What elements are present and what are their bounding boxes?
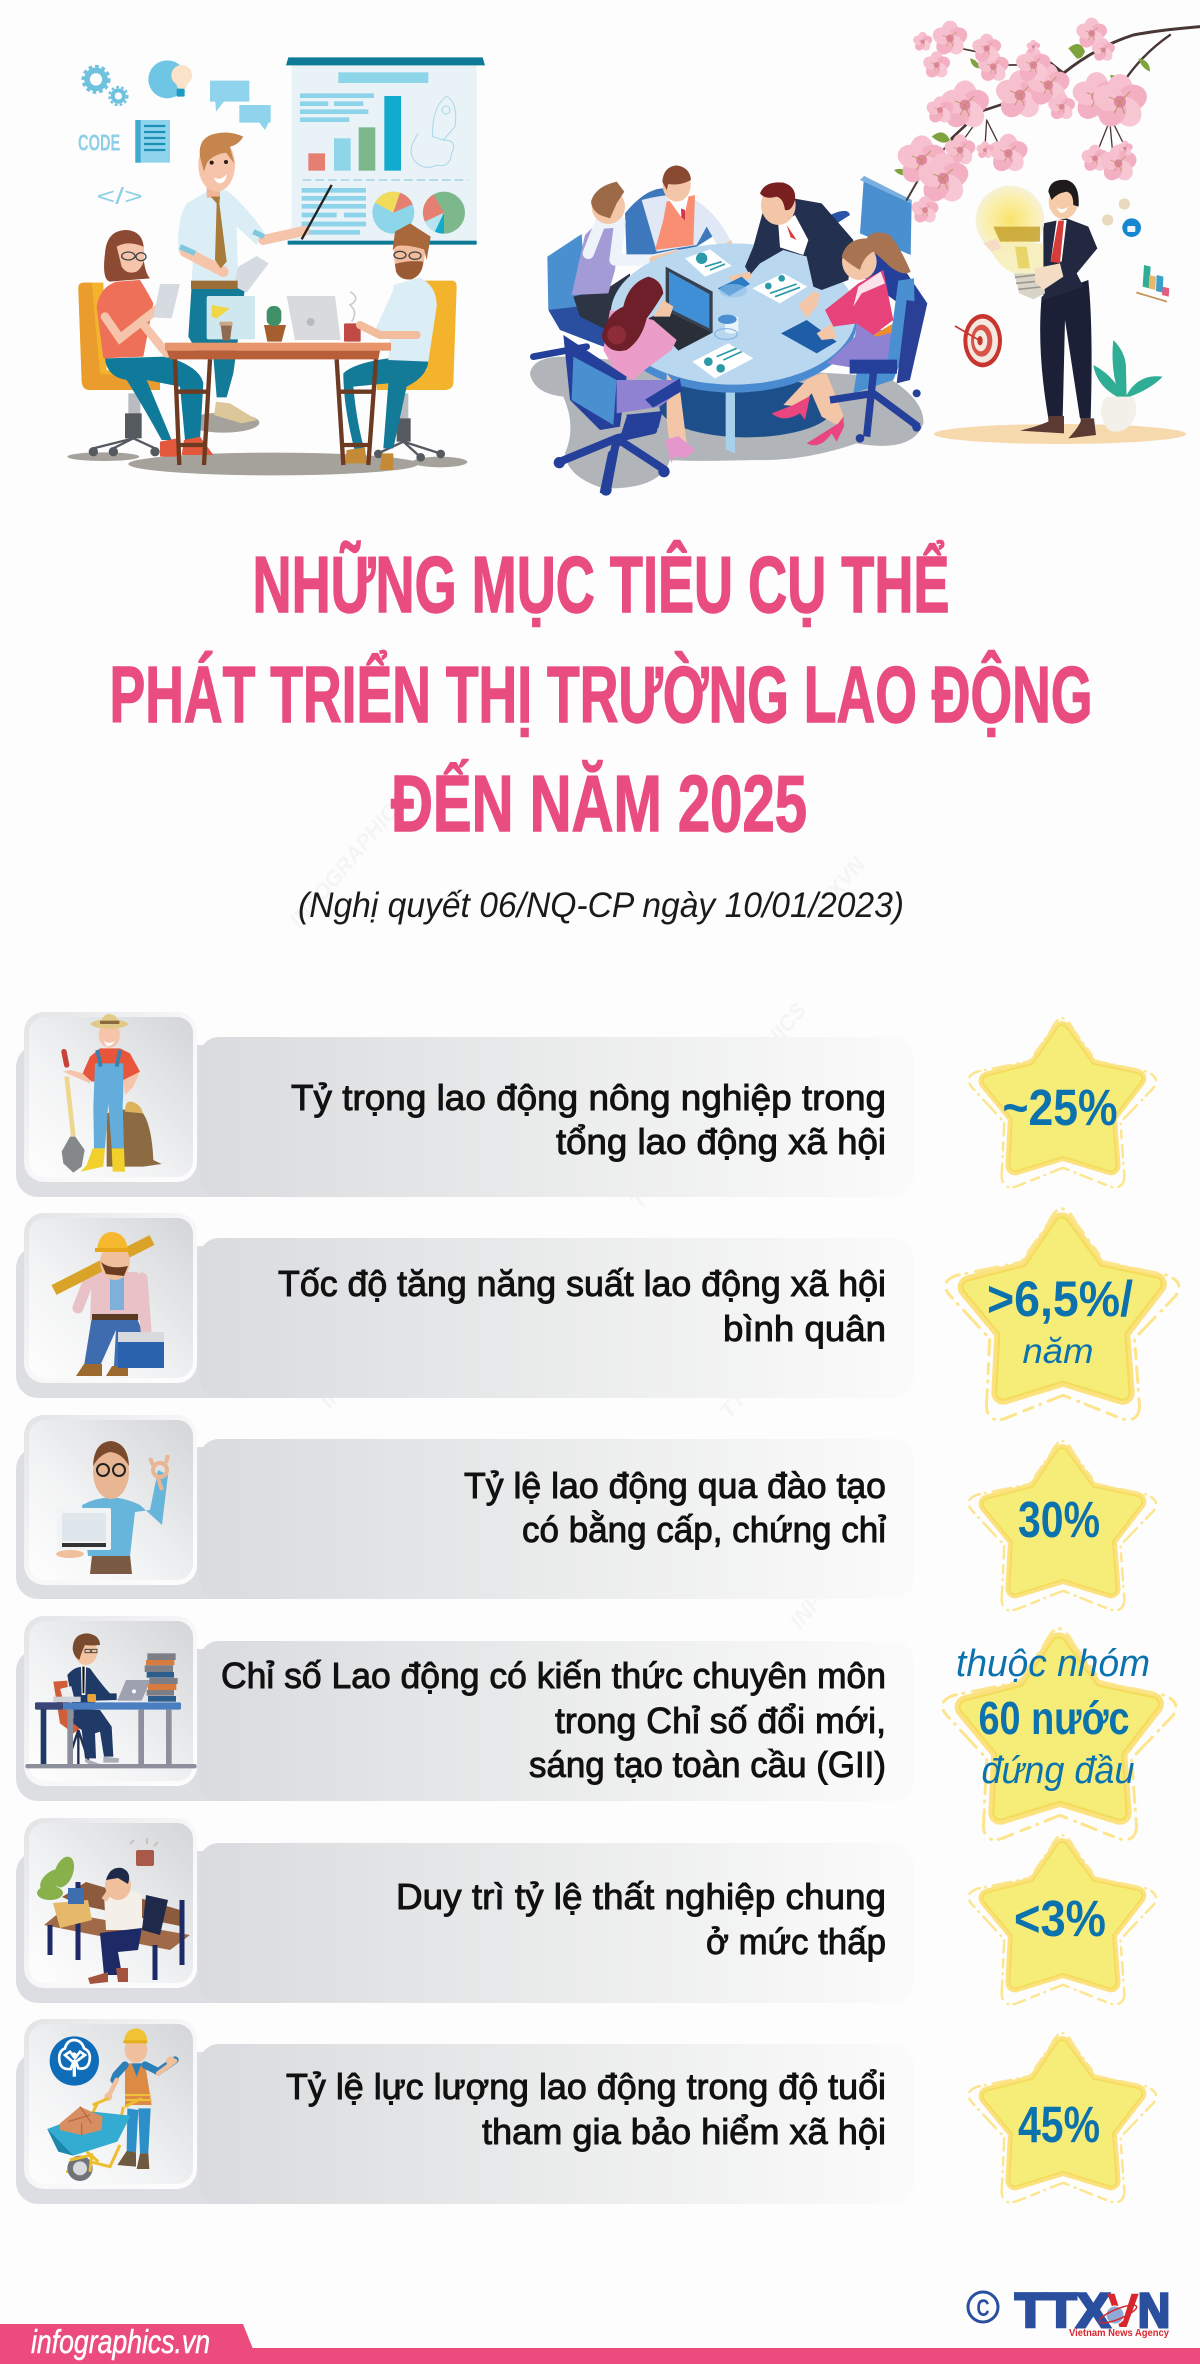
faint watermarks [285, 788, 912, 1633]
star badge: 45% [969, 2033, 1156, 2202]
star badge: 45%: 45% [1018, 2096, 1100, 2153]
panel: GII knowledge index [16, 1616, 914, 1801]
description: Chỉ số Lao động có kiến thức chuyên môn [221, 1655, 886, 1696]
star badge: thuộc nhóm 60 nước đứng đầu: đứng đầu [982, 1750, 1134, 1792]
icon: target [955, 314, 1002, 367]
description: ở mức thấp [706, 1921, 886, 1962]
ground shadow [934, 424, 1186, 444]
back-right chair [830, 176, 927, 317]
faint watermarks: TTXVN [715, 1351, 781, 1423]
description: Tỷ lệ lực lượng lao động trong độ tuổi [286, 2066, 886, 2107]
star badge: ~25% [969, 1018, 1156, 1187]
logo: TTXVN Vietnam News Agency: C [976, 2295, 990, 2322]
icon: code tag: </> [97, 183, 143, 209]
illustration: blossom branch and businessman with lightbulb [894, 18, 1200, 444]
logo: TTXVN Vietnam News Agency: Vietnam News Agency [1069, 2327, 1169, 2339]
table documents [685, 249, 837, 378]
description [286, 2066, 886, 2152]
title: ĐẾN NĂM 2025 [391, 759, 807, 848]
blossom branch [894, 18, 1200, 225]
footer tab with site name: infographics.vn [31, 2323, 210, 2360]
faint watermarks: INFOGRAPHICS [285, 788, 412, 933]
presenter [178, 133, 332, 423]
description: có bằng cấp, chứng chỉ [522, 1509, 886, 1550]
businessman [1020, 180, 1097, 438]
icon: worker with wheelbarrow and insurance logo [47, 2028, 175, 2181]
description: Tốc độ tăng năng suất lao động xã hội [278, 1263, 886, 1304]
icon: man with laptop [56, 1441, 168, 1574]
icons: likes and chart [1102, 198, 1169, 303]
icon: CODE label: CODE [78, 130, 120, 156]
subtitle: (Nghị quyết 06/NQ-CP ngày 10/01/2023) [298, 886, 904, 925]
description [278, 1263, 886, 1349]
logo: TTXVN Vietnam News Agency: N [1138, 2285, 1170, 2338]
faint watermarks: TTXVN [805, 851, 871, 923]
description: trong Chỉ số đổi mới, [555, 1700, 886, 1741]
footer bar [0, 2348, 1200, 2364]
description [291, 1077, 886, 1162]
icon: worried man on bench [36, 1838, 190, 1984]
table [165, 343, 391, 465]
woman in pink top [602, 277, 695, 463]
description: sáng tạo toàn cầu (GII) [529, 1744, 886, 1785]
right chair [830, 278, 927, 443]
description [464, 1465, 886, 1550]
icon: speech bubbles [210, 81, 271, 130]
whiteboard [286, 57, 485, 245]
panel: unemployment [16, 1818, 914, 2003]
description: Tỷ trọng lao động nông nghiệp trong [291, 1077, 886, 1118]
star badge: thuộc nhóm 60 nước đứng đầu: thuộc nhóm [956, 1643, 1150, 1685]
man in orange vest [642, 165, 733, 257]
icon: office worker at desk [25, 1633, 197, 1768]
icon: document [135, 120, 170, 163]
lightbulb [976, 186, 1063, 299]
icon: plant in vase [1093, 340, 1163, 432]
table leg [726, 390, 735, 453]
panel: productivity growth [16, 1213, 914, 1398]
logo: TTXVN Vietnam News Agency: V [1107, 2285, 1139, 2338]
icon: construction worker [54, 1232, 164, 1376]
logo: TTXVN Vietnam News Agency [968, 2285, 1170, 2339]
floor shadow [530, 357, 923, 488]
faint watermarks: TTXVN - INFOGRAPHICS [625, 997, 811, 1213]
woman's orange chair [78, 283, 160, 456]
star badge: >6,5%/ năm [945, 1209, 1179, 1420]
man in dark suit [728, 182, 853, 318]
round table [610, 243, 857, 393]
icon: gears [83, 66, 127, 105]
star badge: 30% [969, 1441, 1156, 1610]
star badge: >6,5%/ năm: >6,5%/ [987, 1271, 1133, 1327]
description [396, 1876, 886, 1962]
star badge: <3% [969, 1835, 1156, 2004]
panel: trained labour [16, 1415, 914, 1599]
panel: agricultural labour share [16, 1012, 914, 1197]
table items [207, 292, 361, 342]
description: tham gia bảo hiểm xã hội [482, 2111, 886, 2152]
description [221, 1655, 886, 1785]
icon: farmer [62, 1014, 162, 1173]
star badge: ~25%: ~25% [1002, 1079, 1118, 1136]
left chair [533, 234, 617, 357]
laptop [648, 267, 713, 351]
description: tổng lao động xã hội [556, 1121, 886, 1162]
woman in pink blazer [772, 232, 911, 445]
illustration: round-table meeting [530, 165, 927, 496]
panel: social insurance [16, 2019, 914, 2204]
icon: lightbulb [148, 60, 192, 98]
chair behind orange vest [625, 188, 713, 260]
logo: TTXVN Vietnam News Agency: TTX [1015, 2285, 1110, 2338]
illustration: team presenting at whiteboard [67, 57, 485, 475]
front chair [554, 335, 680, 496]
title [110, 540, 1092, 848]
description: Tỷ lệ lao động qua đào tạo [464, 1465, 886, 1506]
star badge: >6,5%/ năm: năm [1022, 1332, 1094, 1371]
star badge: <3%: <3% [1014, 1890, 1106, 1947]
description: Duy trì tỷ lệ thất nghiệp chung [396, 1876, 886, 1917]
star badge: thuộc nhóm 60 nước đứng đầu: 60 nước [978, 1692, 1130, 1744]
seated woman [97, 230, 213, 457]
faint watermarks: INFOGRAPHICS [315, 1268, 442, 1413]
floor shadows [67, 413, 467, 475]
man in lilac vest [572, 182, 677, 330]
bearded man's chair [374, 281, 457, 462]
faint watermarks: INFOGRAPHICS [785, 1488, 912, 1633]
star badge: 30%: 30% [1018, 1491, 1100, 1548]
bearded man [343, 223, 437, 470]
star badge: thuộc nhóm 60 nước đứng đầu [942, 1629, 1176, 1840]
description: bình quân [723, 1308, 886, 1349]
table base [659, 376, 834, 437]
